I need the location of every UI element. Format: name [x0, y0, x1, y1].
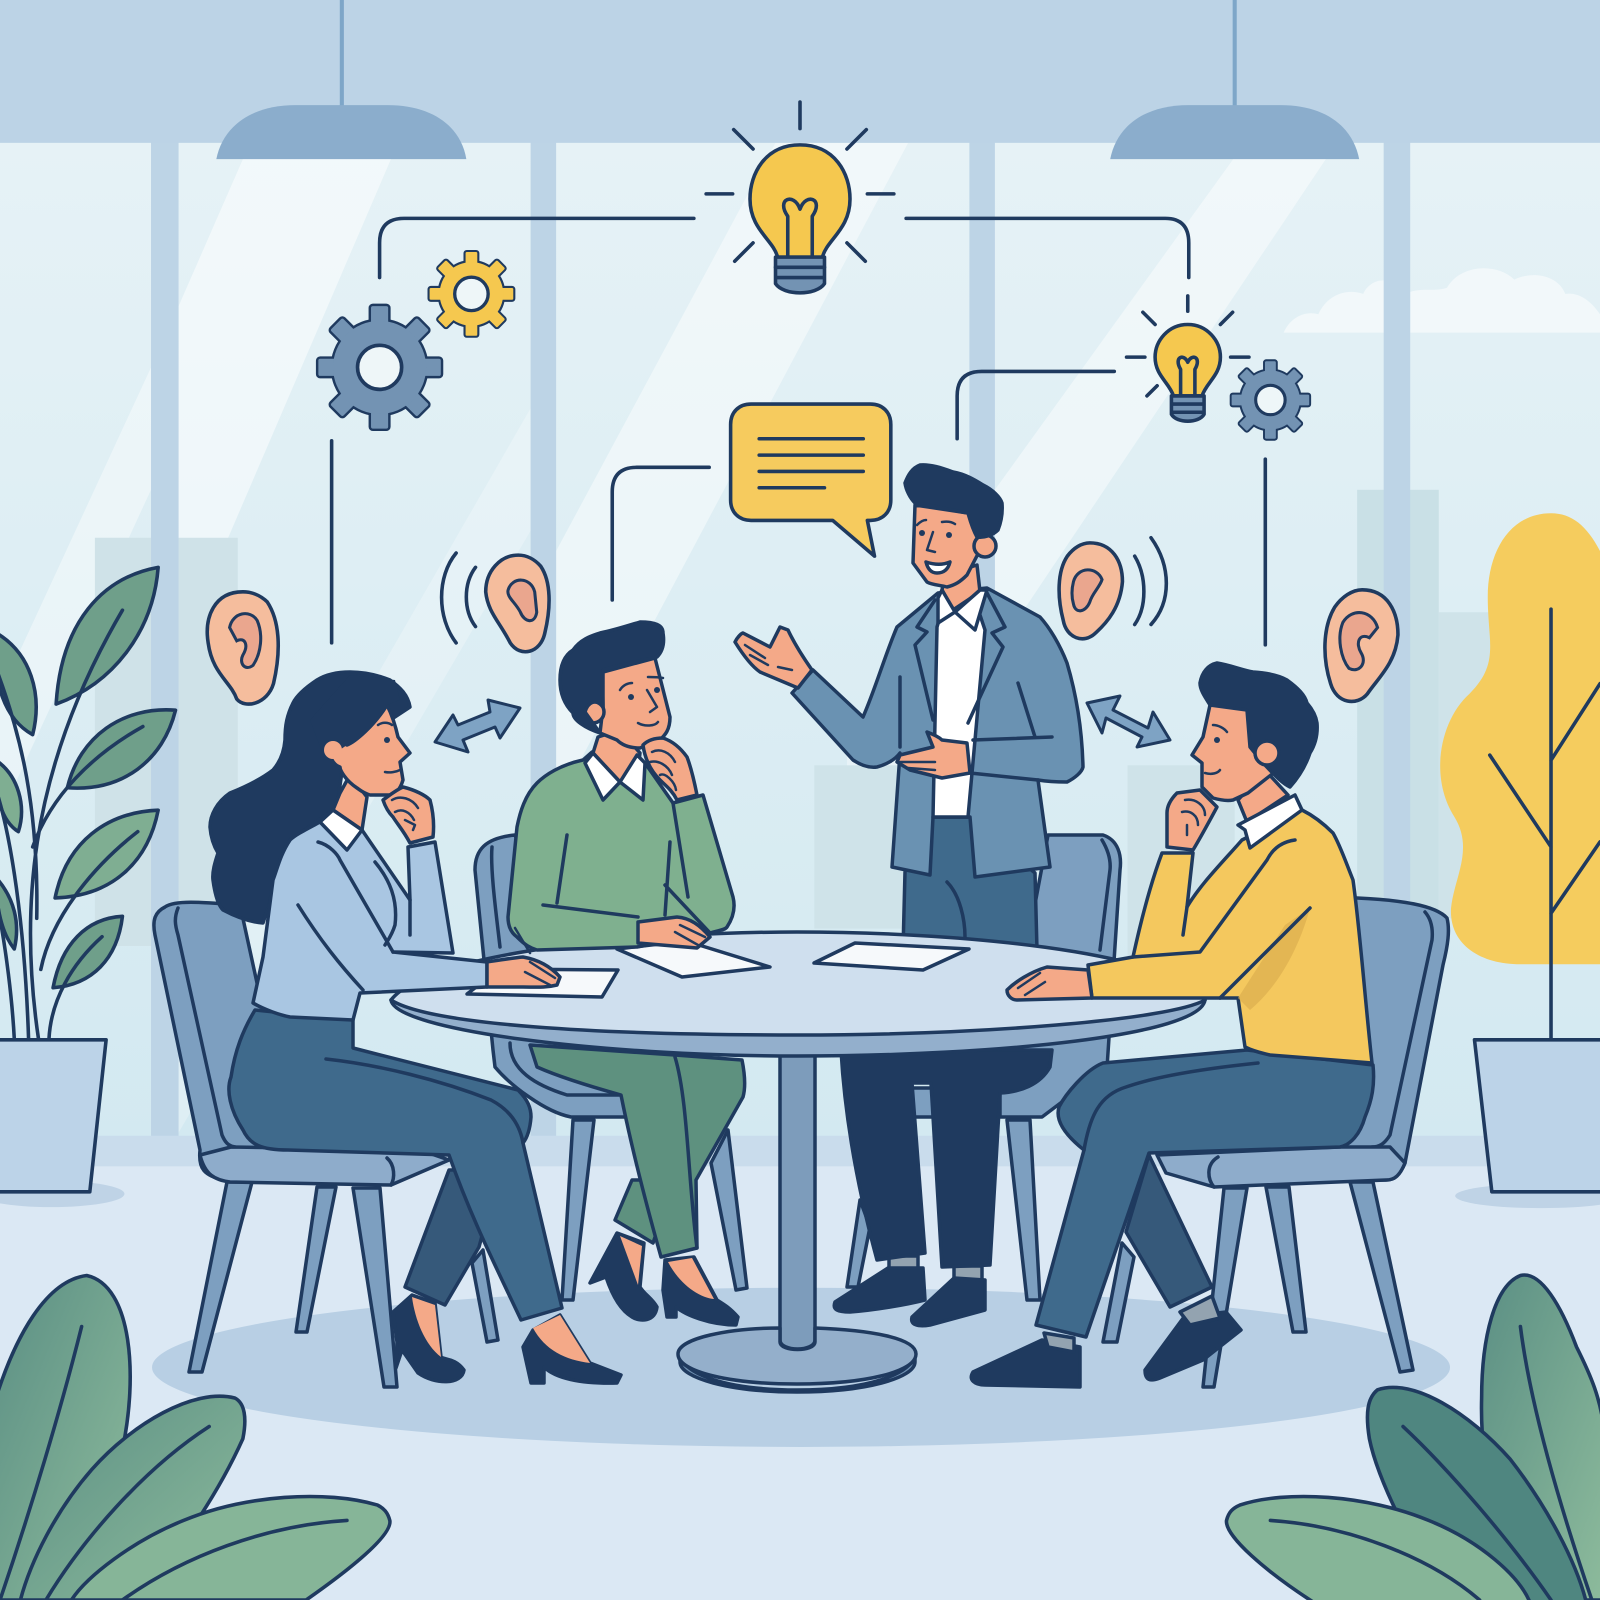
group: seated team and table — [154, 465, 1448, 1392]
connector lines — [332, 218, 1265, 645]
icon: ear far right — [1325, 590, 1398, 701]
icon: large blue gear — [318, 306, 441, 429]
person: yellow man torso and head — [1007, 663, 1372, 1063]
icon: small blue gear — [1232, 361, 1309, 439]
icon: ear with sound waves — [442, 553, 549, 652]
icon: large light bulb — [706, 102, 894, 293]
person: woman torso and head — [210, 672, 560, 1020]
chair: woman's chair — [154, 902, 498, 1387]
icon: ear far left — [207, 592, 278, 704]
chair: back left — [475, 835, 747, 1300]
chair: back right — [847, 835, 1120, 1300]
arrow: double between woman and green — [435, 700, 520, 752]
person: woman legs and shoes — [229, 1010, 621, 1383]
floor shadow ellipse — [152, 1288, 1450, 1447]
person: green sweater torso and head — [508, 622, 734, 950]
arrow: double between standing man and yellow — [1087, 696, 1170, 747]
papers on table — [467, 941, 969, 997]
ceiling lamp left — [216, 0, 466, 159]
person: yellow man legs and shoes — [971, 1050, 1374, 1387]
plant: bottom right leaves — [1226, 1275, 1600, 1600]
icon: speech bubble — [731, 404, 891, 556]
plant: yellow tree right — [1440, 513, 1600, 1208]
person: standing man legs and shoes — [834, 817, 1052, 1326]
table — [391, 932, 1205, 1392]
person: green sweater legs and shoes — [530, 1045, 745, 1325]
icon: small light bulb — [1127, 312, 1249, 421]
chair: yellow man's chair — [1103, 898, 1448, 1387]
icon: ear near standing man — [1059, 538, 1166, 639]
plant: left potted — [0, 567, 176, 1207]
person: standing man torso and head — [735, 465, 1083, 877]
plant: bottom left leaves — [0, 1276, 390, 1600]
ceiling lamp right — [1110, 0, 1359, 159]
icon: yellow gear — [430, 252, 513, 336]
